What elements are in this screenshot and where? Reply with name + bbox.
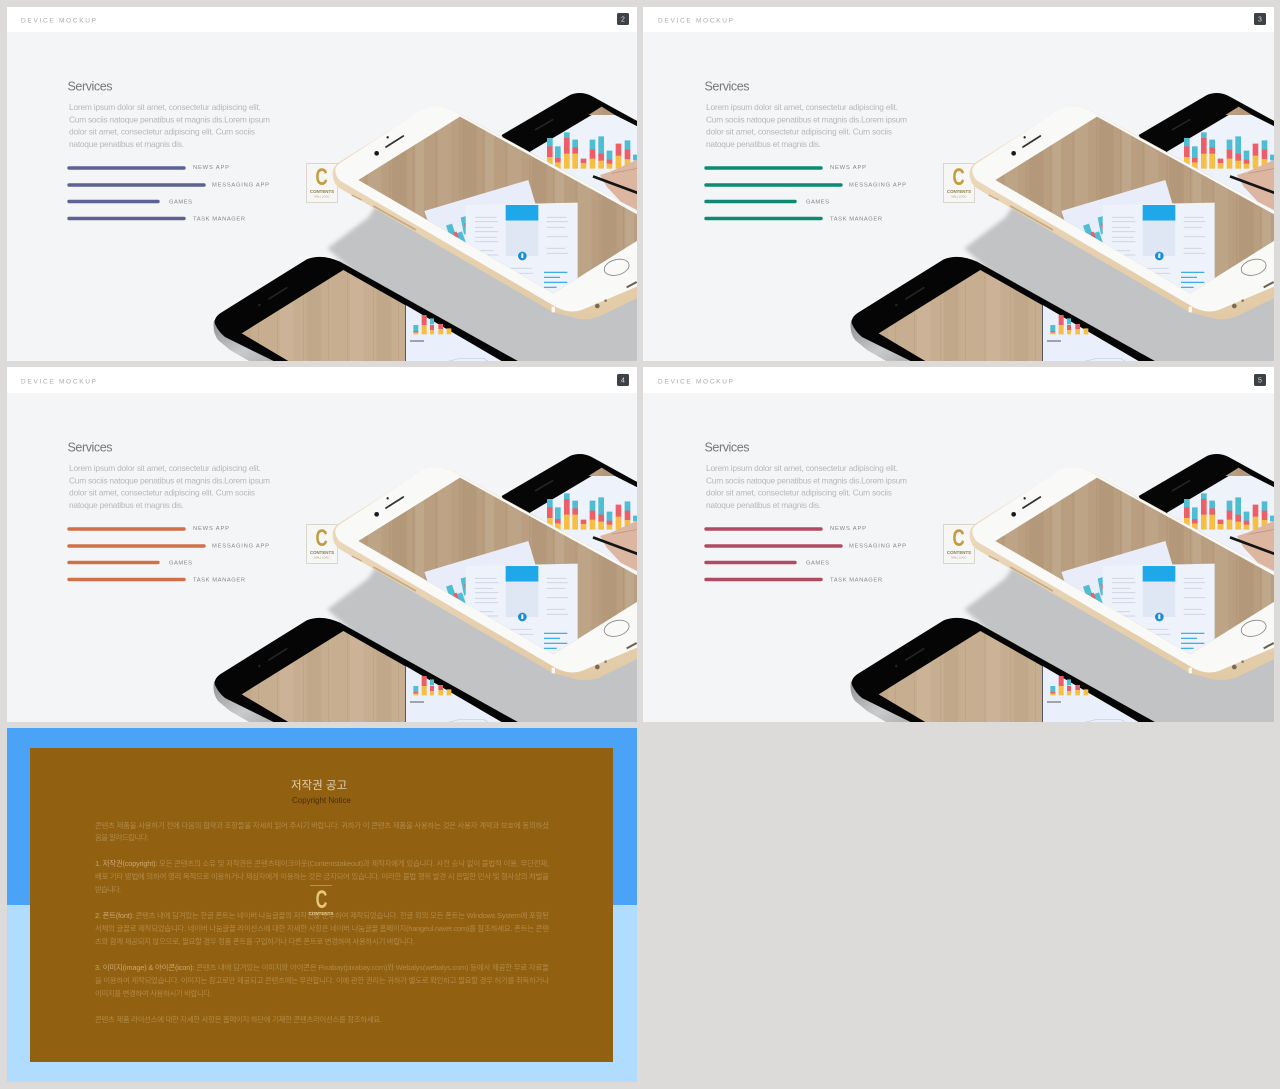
panel: services slide 5 (rose) [643, 367, 1274, 722]
service bars: TASK MANAGER [830, 216, 882, 222]
page number badge: 3 [1258, 16, 1262, 24]
section 2: font: 츠와 함께 제공되지 않으므로, 필요할 경우 정품 폰트를 구입하거나 다른 폰트로 변경하여 사용하시기 바랍니다. [95, 937, 415, 946]
logo: C [952, 525, 965, 552]
service bars [706, 165, 906, 222]
notice title: 저작권 공고 [291, 779, 347, 792]
device mockup image [850, 454, 1280, 774]
device mockup image [213, 93, 707, 413]
body text: Lorem ipsum dolor sit amet, consectetur adipiscing elit. [706, 463, 898, 473]
header bar [637, 0, 1280, 32]
panel: services slide 3 (green) [643, 7, 1274, 361]
page number badge: 2 [621, 16, 625, 24]
section 3: image and icon: 을 이용하여 제작되었습니다. 이미지는 참고로만 제공되고 콘텐츠에는 무관합니다. 이에 관한 권리는 귀하가 별도로 확인하고 필요할 경우 허가를 취득하거나 [95, 976, 549, 985]
service bars: GAMES [169, 560, 192, 566]
service bars [69, 165, 269, 222]
header bar [0, 361, 700, 393]
heading: Services [704, 440, 750, 454]
heading: Services [704, 80, 750, 94]
body text [69, 102, 270, 149]
section 1: copyright: 1. 저작권(copyright): 모든 콘텐츠의 소유 및 저작권은 콘텐츠테이크아웃(Contentstakeout)과 제작자에게 있습니다. 사전 승낙 없이 불법적 이용, 무단전재, [95, 859, 549, 868]
logo [306, 164, 338, 202]
header bar [0, 0, 700, 32]
service bars: MESSAGING APP [212, 182, 269, 188]
service bars: NEWS APP [193, 526, 229, 532]
section 3: image and icon [95, 963, 549, 998]
intro text: 음을 알려드립니다. [95, 833, 149, 842]
header bar [637, 361, 1280, 393]
centre logo [309, 886, 333, 916]
logo: MALL LOGO [315, 194, 329, 198]
service bars: GAMES [806, 200, 829, 206]
body text: natoque penatibus et magnis dis. [706, 500, 821, 510]
service bars: NEWS APP [193, 165, 229, 171]
body text: natoque penatibus et magnis dis. [69, 139, 184, 149]
body text: natoque penatibus et magnis dis. [706, 139, 821, 149]
logo: C [315, 164, 328, 191]
page number badge [617, 13, 629, 25]
service bars: MESSAGING APP [849, 182, 906, 188]
section 1: copyright [95, 859, 549, 894]
page number badge: 4 [621, 378, 625, 384]
body text [706, 102, 907, 149]
service bars: MESSAGING APP [849, 544, 906, 550]
body text: Lorem ipsum dolor sit amet, consectetur adipiscing elit. [706, 102, 898, 112]
service bars: NEWS APP [830, 165, 866, 171]
section 2: font: 2. 폰트(font): 콘텐츠 내에 담겨있는 한글 폰트는 네이버 나눔글꼴의 저작권을 준수하여 제작되었습니다. 한글 외의 모든 폰트는 Windows System에 포함된 [95, 911, 549, 920]
service bars [69, 526, 269, 584]
section 1: copyright: 받습니다. [95, 885, 121, 894]
centre logo: CONTENTS [309, 911, 333, 916]
logo: CONTENTS [947, 550, 971, 555]
service bars [706, 526, 906, 584]
body text: Cum sociis natoque penatibus et magnis dis.Lorem ipsum [706, 114, 907, 124]
logo: C [952, 164, 965, 191]
body text: Lorem ipsum dolor sit amet, consectetur adipiscing elit. [69, 102, 261, 112]
body text: dolor sit amet, consectetur adipiscing elit. Cum sociis [706, 488, 892, 498]
section 3: image and icon: 이미지를 변경하여 사용하시기 바랍니다. [95, 989, 212, 998]
logo [306, 524, 338, 564]
body text: Cum sociis natoque penatibus et magnis dis.Lorem ipsum [69, 476, 270, 486]
body text: Cum sociis natoque penatibus et magnis dis.Lorem ipsum [69, 114, 270, 124]
body text [69, 463, 270, 510]
body text: dolor sit amet, consectetur adipiscing elit. Cum sociis [69, 488, 255, 498]
body text: dolor sit amet, consectetur adipiscing elit. Cum sociis [706, 126, 892, 136]
page number badge: 5 [1258, 378, 1262, 384]
heading: Services [68, 440, 112, 454]
logo: C [315, 525, 328, 552]
logo: MALL LOGO [952, 194, 966, 198]
logo: MALL LOGO [315, 556, 329, 560]
closing note: 콘텐츠 제품 라이선스에 대한 자세한 사항은 홈페이지 하단에 기재한 콘텐츠라이선스를 참조하세요. [95, 1015, 382, 1024]
panel: services slide 2 (purple) [7, 7, 637, 361]
section 2: font [95, 911, 549, 946]
device mockup image [850, 93, 1280, 413]
page number badge [617, 374, 629, 386]
section 3: image and icon: 3. 이미지(image) & 아이콘(icon): 콘텐츠 내에 담겨있는 이미지와 아이콘은 Pixabay(pixabay.com)와 Webalys(webalys.com) 등에서 제공한 무료 자료들 [95, 963, 549, 972]
service bars: GAMES [169, 200, 192, 206]
device mockup image [213, 454, 707, 774]
service bars: GAMES [806, 560, 829, 566]
page number badge [1254, 13, 1266, 25]
header bar: DEVICE MOCKUP [21, 378, 96, 386]
page number badge [1254, 374, 1266, 386]
heading: Services [68, 80, 112, 94]
panel: services slide 4 (orange) [7, 367, 637, 722]
logo: CONTENTS [310, 550, 334, 555]
body text [706, 463, 907, 510]
header bar: DEVICE MOCKUP [21, 18, 96, 24]
header bar: DEVICE MOCKUP [658, 18, 733, 24]
body text: natoque penatibus et magnis dis. [69, 500, 184, 510]
logo: CONTENTS [947, 189, 971, 194]
logo: CONTENTS [310, 189, 334, 194]
body text: Lorem ipsum dolor sit amet, consectetur adipiscing elit. [69, 463, 261, 473]
logo [944, 164, 974, 202]
intro text: 콘텐츠 제품을 사용하기 전에 다음의 협약과 조항들을 자세히 읽어 주시기 바랍니다. 귀하가 이 콘텐츠 제품을 사용하는 것은 사용자 계약과 보호에 동의하셨 [95, 821, 549, 830]
logo [944, 524, 974, 564]
service bars: TASK MANAGER [193, 578, 245, 584]
service bars: TASK MANAGER [830, 578, 882, 584]
panel: copyright notice [7, 728, 637, 1082]
body text: Cum sociis natoque penatibus et magnis dis.Lorem ipsum [706, 476, 907, 486]
service bars: MESSAGING APP [212, 544, 269, 550]
intro text [95, 821, 549, 842]
service bars: NEWS APP [830, 526, 866, 532]
logo: MALL LOGO [952, 556, 966, 560]
body text: dolor sit amet, consectetur adipiscing elit. Cum sociis [69, 126, 255, 136]
centre logo: C [316, 887, 327, 914]
section 2: font: 서체의 글꼴로 제작되었습니다. 네이버 나눔글꼴 라이선스에 대한 자세한 사항은 네이버 나눔글꼴 홈페이지(hangeul.naver.com)를 참조하세요. 폰트는 콘텐 [95, 924, 549, 933]
notice subtitle: Copyright Notice [292, 796, 352, 805]
section 1: copyright: 배포 기타 방법에 의하여 영리 목적으로 이용하거나 제삼자에게 이용하는 것은 금지되어 있습니다. 이러한 불법 행위 발견 시 은밀한 민사 및 형사상의 처벌을 [95, 872, 549, 881]
service bars: TASK MANAGER [193, 216, 245, 222]
header bar: DEVICE MOCKUP [658, 378, 733, 386]
